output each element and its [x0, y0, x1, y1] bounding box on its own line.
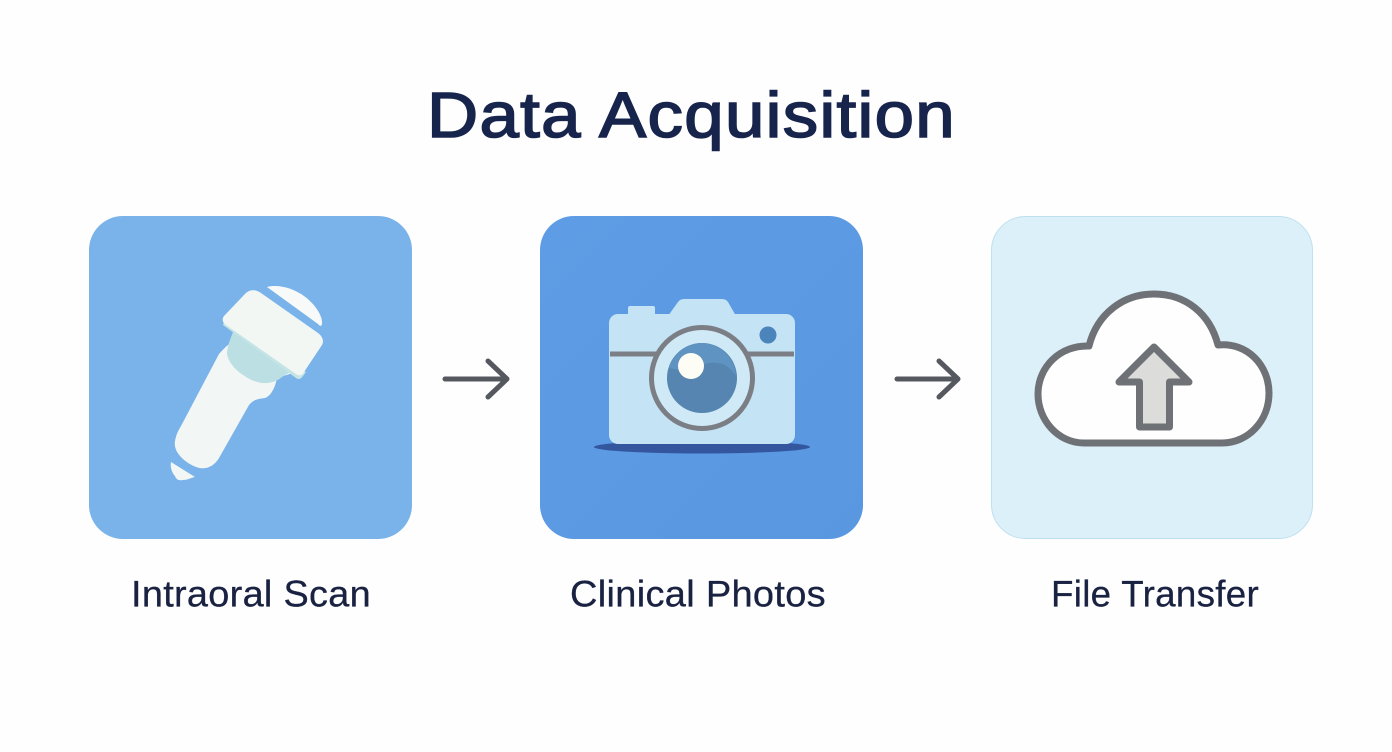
label: file transfer: File Transfer: [1051, 574, 1259, 614]
title: Data Acquisition: [427, 79, 956, 151]
card: intraoral scan: [89, 216, 412, 539]
icon: camera: [594, 299, 810, 454]
card: file transfer: [992, 216, 1312, 538]
panel: intraoral scan: [89, 216, 412, 539]
arrow: photos to transfer: [897, 361, 958, 397]
panel: file transfer: [992, 216, 1312, 538]
card: clinical photos: [540, 216, 863, 539]
icon: intraoral scanner: [171, 286, 323, 480]
panel: clinical photos: [540, 216, 863, 539]
label: clinical photos: Clinical Photos: [570, 574, 826, 614]
icon: cloud upload: [1038, 294, 1269, 443]
label: intraoral scan: Intraoral Scan: [131, 574, 371, 614]
arrow: scan to photos: [445, 361, 507, 397]
